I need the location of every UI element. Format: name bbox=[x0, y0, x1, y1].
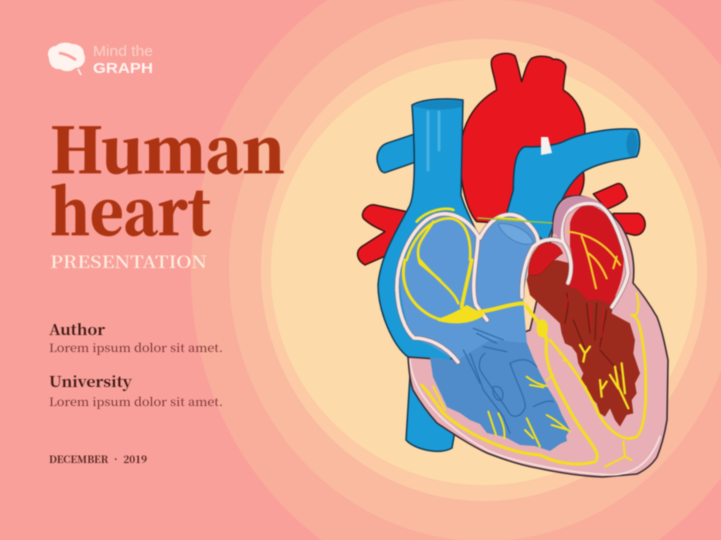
subtitle: PRESENTATION bbox=[50, 248, 207, 273]
vessel: superior vena cava and right atrium outer bbox=[378, 99, 480, 370]
right chambers: blue bbox=[400, 214, 535, 362]
vessel: pulmonary trunk bbox=[507, 129, 640, 243]
title: Human bbox=[50, 102, 285, 191]
outer wall lining bbox=[410, 360, 660, 475]
vessel: superior vena cava opening and highlight bbox=[413, 101, 462, 170]
author block: Author bbox=[49, 319, 106, 340]
papillary muscles bbox=[565, 293, 623, 377]
heart body bbox=[408, 196, 668, 477]
logo wordmark: Mind the bbox=[93, 43, 153, 60]
wall fill bbox=[397, 203, 628, 362]
conduction system: right atrium top bbox=[407, 209, 520, 280]
university block: University bbox=[49, 371, 132, 392]
chordae and valve in right ventricle bbox=[463, 328, 553, 433]
left ventricle: dark red bbox=[527, 260, 640, 427]
vessel: inferior vena cava bbox=[406, 375, 456, 451]
logo: Mind the Graph: GRAPH bbox=[93, 60, 153, 77]
title: heart bbox=[50, 164, 212, 253]
aortic valve lobes bbox=[498, 224, 533, 244]
university block: Lorem ipsum dolor sit amet. bbox=[49, 394, 223, 410]
right ventricle bbox=[430, 340, 570, 451]
conduction system: lower bbox=[403, 260, 646, 467]
title bbox=[50, 102, 285, 253]
chamber walls: white bbox=[397, 203, 628, 362]
author block: Lorem ipsum dolor sit amet. bbox=[49, 340, 223, 356]
wall outlines bbox=[397, 203, 628, 362]
vessel end: pulmonary trunk opening bbox=[626, 131, 638, 157]
logo: Mind the Graph bbox=[48, 43, 153, 77]
left atrium: bright red bbox=[568, 205, 624, 305]
pulmonary vein lumps bbox=[528, 243, 563, 275]
icon: brain bbox=[48, 43, 85, 75]
upper wall lilac cap bbox=[553, 196, 605, 240]
author block bbox=[49, 319, 223, 356]
vessel: aorta bbox=[460, 53, 585, 227]
conduction system: left atrium bbox=[568, 232, 620, 288]
vessel: right pulmonary artery bbox=[377, 133, 417, 173]
conduction line: internodal tract bbox=[478, 218, 552, 223]
date: DECEMBER • 2019 bbox=[49, 451, 147, 466]
ligament bbox=[541, 137, 552, 155]
vessels: red pulmonary veins bbox=[358, 184, 645, 265]
heart illustration bbox=[358, 53, 668, 477]
university block bbox=[49, 371, 223, 410]
